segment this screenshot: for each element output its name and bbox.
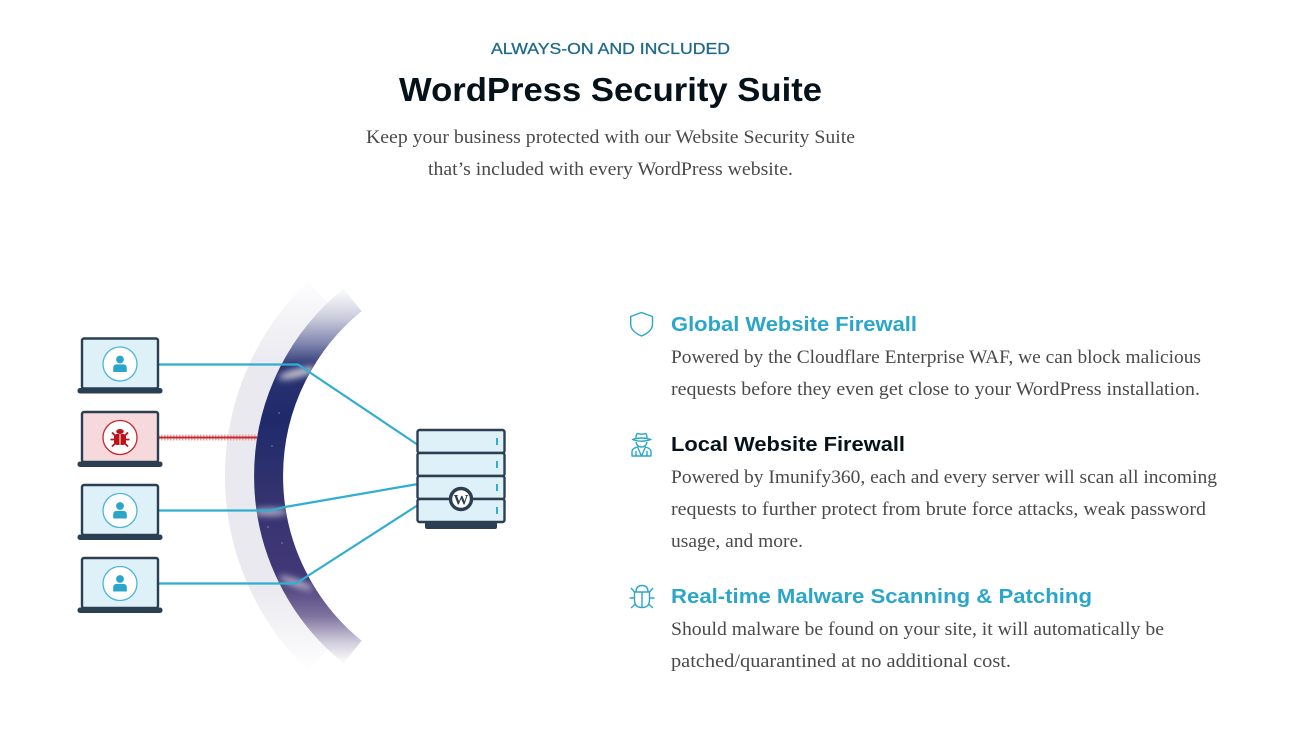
outer light arc band (239, 292, 318, 660)
laptop: user 1 (78, 338, 162, 394)
feature: real-time malware scanning: Should malware be found on your site, it will automatically be (671, 619, 1164, 640)
feature: global website firewall: Global Website Firewall (671, 314, 917, 336)
feature: local website firewall (632, 434, 1217, 552)
server stack with WordPress logo: W (454, 492, 468, 508)
intro text: that’s included with every WordPress website. (428, 159, 793, 180)
icon: bug outline (630, 586, 654, 608)
icon: shield (631, 312, 652, 336)
feature: local website firewall: usage, and more. (671, 531, 803, 552)
eyebrow heading: ALWAYS-ON AND INCLUDED (491, 41, 730, 58)
intro text: Keep your business protected with our Website Security Suite (366, 127, 855, 148)
intro text (366, 127, 855, 180)
connection lines (158, 364, 418, 584)
laptop: user 3 (78, 485, 162, 540)
feature: real-time malware scanning (630, 586, 1164, 672)
title: WordPress Security Suite (399, 72, 822, 109)
feature: real-time malware scanning: patched/quarantined at no additional cost. (671, 651, 1011, 672)
feature: global website firewall: Powered by the Cloudflare Enterprise WAF, we can block malicious (671, 347, 1201, 368)
arc glow highlights (252, 364, 318, 592)
feature: real-time malware scanning: Real-time Malware Scanning & Patching (671, 586, 1092, 608)
firewall arc diagram (239, 292, 352, 660)
feature: global website firewall (631, 312, 1201, 400)
feature: global website firewall: requests before they even get close to your WordPress installation. (671, 379, 1200, 400)
feature: local website firewall: Local Website Firewall (671, 434, 905, 456)
icon: spy (632, 434, 651, 456)
laptop: user 4 (78, 558, 162, 613)
server stack with WordPress logo (418, 430, 504, 529)
feature: local website firewall: requests to further protect from brute force attacks, weak password (671, 499, 1207, 520)
laptop: malicious bug (78, 412, 162, 467)
inner dark arc band (269, 300, 352, 652)
feature: local website firewall: Powered by Imunify360, each and every server will scan all incoming (671, 467, 1217, 488)
blocked red connection (158, 434, 257, 440)
